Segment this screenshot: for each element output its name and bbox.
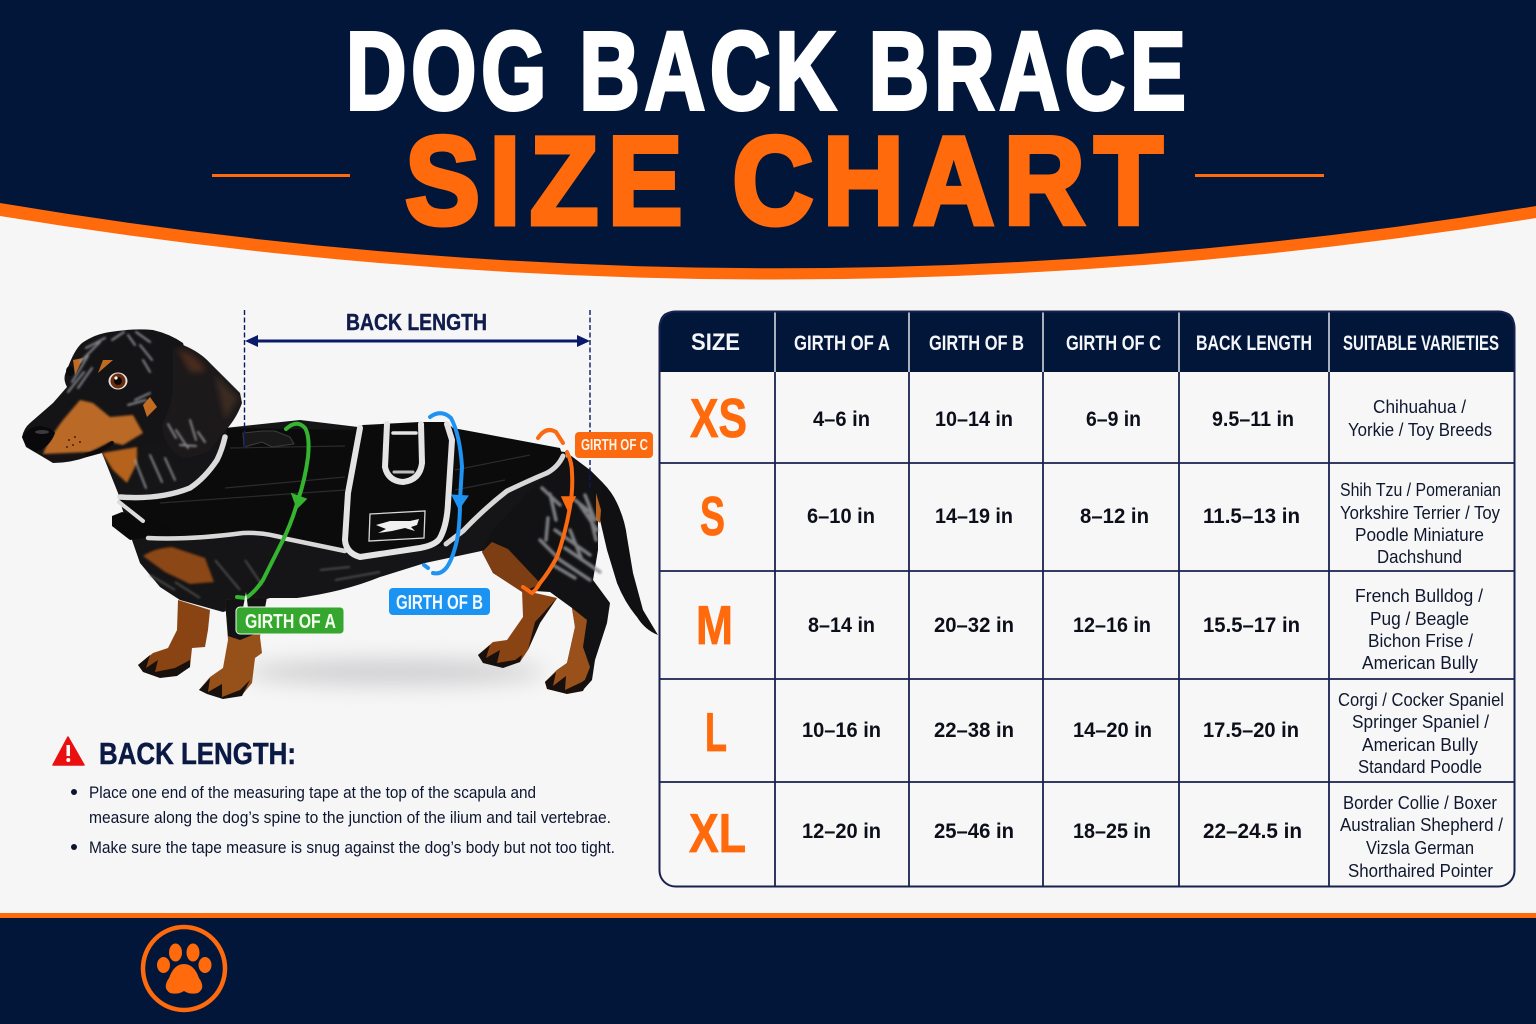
lower lip — [44, 455, 86, 459]
dog ear — [162, 345, 242, 458]
girth A label: GIRTH OF A — [245, 611, 336, 633]
row M: American Bully — [1362, 652, 1479, 673]
tan chest patch — [143, 547, 214, 584]
chest fur streaks — [150, 560, 380, 598]
row XS: Chihuahua / — [1373, 396, 1467, 417]
row XS — [690, 387, 1492, 449]
row S: 8–12 in — [1080, 505, 1149, 528]
table body background — [660, 312, 1514, 886]
row XS: Yorkie / Toy Breeds — [1348, 419, 1492, 440]
row S — [700, 479, 1501, 567]
table header row: BACK LENGTH — [1196, 332, 1312, 355]
buckle — [243, 431, 294, 447]
row S: Shih Tzu / Pomeranian — [1340, 479, 1501, 500]
bullet one — [71, 784, 611, 827]
bullet two: Make sure the tape measure is snug against the dog’s body but not too tight. — [89, 839, 615, 857]
table header row — [659, 311, 1515, 372]
brace panel — [345, 424, 452, 557]
girth C arrow — [523, 430, 575, 593]
row XL: Australian Shepherd / — [1340, 814, 1504, 835]
rear paw nails — [545, 672, 590, 694]
nose — [22, 426, 55, 452]
girth A label — [236, 592, 344, 634]
title: size chart: SIZE CHART — [405, 112, 1163, 251]
dog body — [118, 420, 570, 612]
row XL: Vizsla German — [1366, 837, 1474, 858]
row L: 22–38 in — [934, 719, 1014, 742]
row XL: 12–20 in — [802, 820, 881, 843]
dog neck — [102, 420, 228, 498]
bullet one: Place one end of the measuring tape at the top of the scapula and — [89, 784, 536, 802]
row S: Yorkshire Terrier / Toy — [1340, 502, 1501, 523]
row XS: XS — [690, 387, 747, 449]
girth B arrow — [424, 413, 468, 573]
header banner — [0, 0, 1536, 280]
table header row: SIZE — [691, 329, 740, 356]
back length measure — [244, 309, 590, 490]
row M: 15.5–17 in — [1203, 614, 1300, 637]
row XL: Border Collie / Boxer — [1343, 792, 1497, 813]
hem piping — [148, 533, 345, 551]
row M: M — [696, 594, 733, 656]
girth B label: GIRTH OF B — [396, 592, 483, 614]
row M: 20–32 in — [934, 614, 1014, 637]
tan muzzle — [43, 400, 143, 454]
row XS: 10–14 in — [935, 408, 1013, 431]
ground shadow — [245, 659, 545, 685]
row S: 6–10 in — [807, 505, 875, 528]
near front leg — [199, 597, 267, 699]
far front leg — [138, 600, 210, 678]
girth A arrow — [237, 424, 309, 598]
row S: S — [700, 485, 725, 547]
row L: 14–20 in — [1073, 719, 1152, 742]
row XL: 22–24.5 in — [1203, 820, 1302, 843]
row L: 10–16 in — [802, 719, 881, 742]
row S: Poodle Miniature — [1355, 524, 1484, 545]
title: dog back brace: DOG BACK BRACE — [346, 10, 1186, 133]
girth C label — [575, 432, 653, 458]
row L: Springer Spaniel / — [1352, 711, 1490, 732]
merle coat streaks — [68, 332, 205, 488]
rear piping — [446, 456, 563, 544]
row XS: 9.5–11 in — [1212, 408, 1294, 431]
table header row: GIRTH OF C — [1066, 332, 1161, 355]
black brace coat — [118, 422, 564, 559]
row XL: Shorthaired Pointer — [1348, 860, 1493, 881]
brace handle — [385, 424, 422, 482]
size table — [659, 311, 1515, 887]
tan brows — [73, 358, 113, 375]
tan rear leg — [545, 608, 590, 693]
row L: American Bully — [1362, 734, 1479, 755]
row M: French Bulldog / — [1355, 585, 1484, 606]
instructions heading: BACK LENGTH: — [99, 736, 296, 771]
back length instructions — [53, 736, 615, 857]
dog head — [22, 329, 200, 463]
collar piping — [119, 437, 225, 521]
row XL: 25–46 in — [934, 820, 1014, 843]
near rear leg and haunch — [482, 455, 610, 693]
muzzle whisker dots — [66, 437, 81, 447]
row M: 12–16 in — [1073, 614, 1151, 637]
logo patch — [369, 511, 425, 541]
girth B label — [389, 588, 490, 615]
coat quilting — [160, 446, 530, 503]
row XL: XL — [689, 802, 746, 864]
dog tail — [590, 470, 658, 635]
row XS: 4–6 in — [813, 408, 870, 431]
row M — [696, 585, 1484, 673]
title rule left — [212, 174, 350, 177]
tan back edge of thigh — [596, 493, 601, 523]
title rule right — [1195, 174, 1324, 177]
row L: 17.5–20 in — [1203, 719, 1299, 742]
row S: 11.5–13 in — [1203, 505, 1300, 528]
mouth line — [86, 443, 112, 455]
tan throat — [102, 447, 137, 483]
tan thigh — [482, 542, 541, 592]
table header row: GIRTH OF A — [794, 332, 890, 355]
row S: 14–19 in — [935, 505, 1013, 528]
chest strap and buckle — [112, 512, 170, 540]
girth C label: GIRTH OF C — [581, 437, 648, 454]
dog illustration — [22, 309, 658, 699]
row XS: 6–9 in — [1086, 408, 1141, 431]
rear merle streaks — [540, 488, 600, 580]
row XL — [689, 792, 1504, 881]
row L: L — [705, 701, 727, 763]
far eye — [66, 366, 74, 376]
row L — [705, 689, 1504, 777]
back length label: BACK LENGTH — [346, 309, 487, 335]
icon: warning triangle — [53, 737, 84, 765]
row L: Standard Poodle — [1358, 756, 1482, 777]
row XL: 18–25 in — [1073, 820, 1151, 843]
row S: Dachshund — [1377, 546, 1462, 567]
eye — [108, 372, 128, 390]
row M: Bichon Frise / — [1368, 630, 1474, 651]
tan cheek — [143, 397, 157, 417]
row L: Corgi / Cocker Spaniel — [1338, 689, 1504, 710]
bullet one: measure along the dog’s spine to the junction of the ilium and tail vertebrae. — [89, 809, 611, 827]
table border — [660, 312, 1514, 886]
table header row: GIRTH OF B — [929, 332, 1024, 355]
footer band — [0, 913, 1536, 1024]
row M: Pug / Beagle — [1370, 608, 1469, 629]
row M: 8–14 in — [808, 614, 875, 637]
far rear leg — [478, 590, 557, 668]
icon: paw badge — [143, 927, 225, 1010]
